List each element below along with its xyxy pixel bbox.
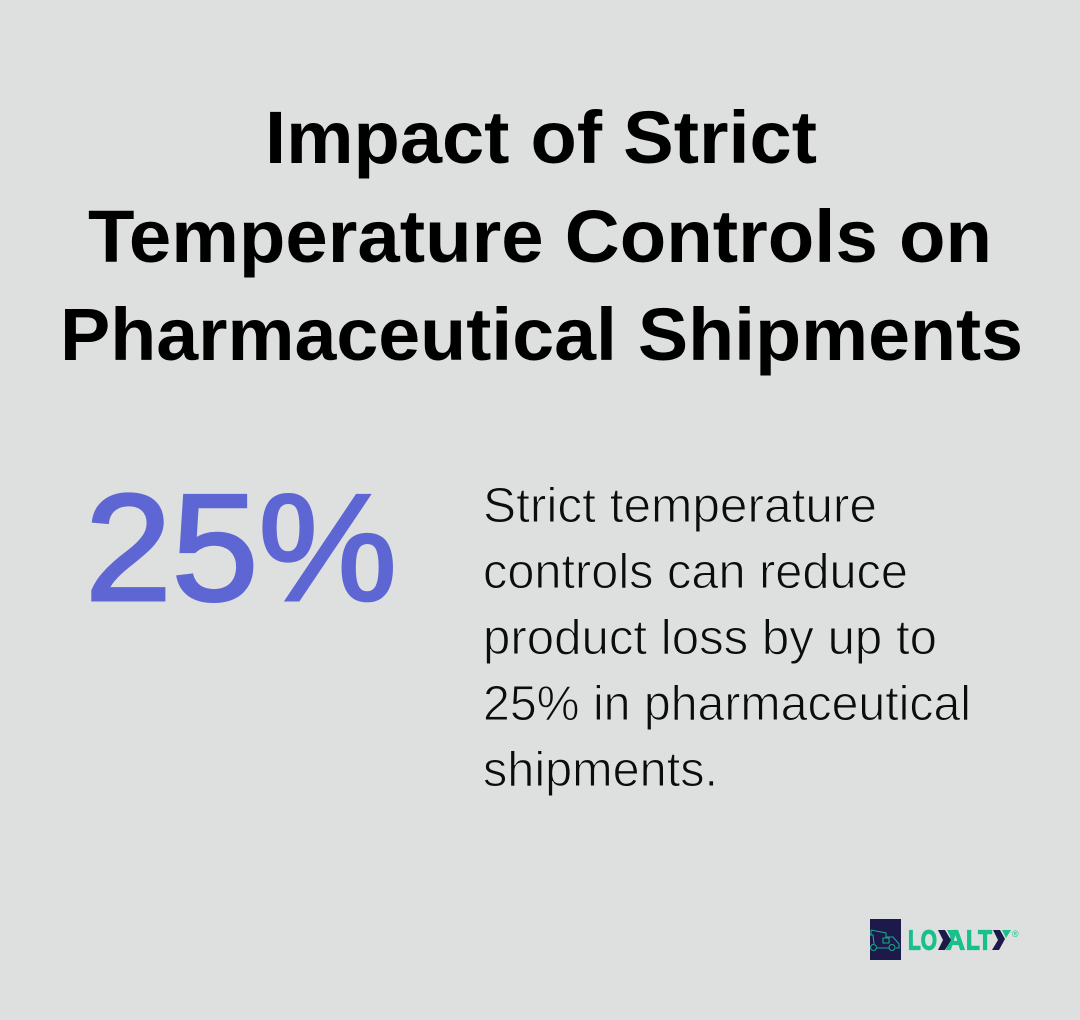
logo wordmark: LT: [966, 924, 992, 956]
description text: [483, 479, 971, 797]
title: Impact of Strict: [265, 96, 817, 179]
description text: controls can reduce: [483, 545, 908, 599]
title: [60, 96, 1023, 376]
description text: Strict temperature: [483, 479, 877, 533]
registered mark: ®: [1012, 929, 1019, 939]
logo wordmark: A: [946, 924, 965, 956]
description text: 25% in pharmaceutical: [483, 677, 971, 731]
description text: shipments.: [483, 743, 718, 797]
logo: Loyalty: [870, 919, 1019, 960]
icon: truck on navy square: [870, 919, 901, 960]
big statistic: 25%: 25%: [85, 463, 397, 633]
wordmark Y letters: [938, 930, 1011, 950]
title: Pharmaceutical Shipments: [60, 293, 1023, 376]
title: Temperature Controls on: [88, 195, 992, 278]
logo wordmark: LO: [908, 924, 937, 956]
description text: product loss by up to: [483, 611, 937, 665]
logo wordmark: [908, 924, 992, 956]
